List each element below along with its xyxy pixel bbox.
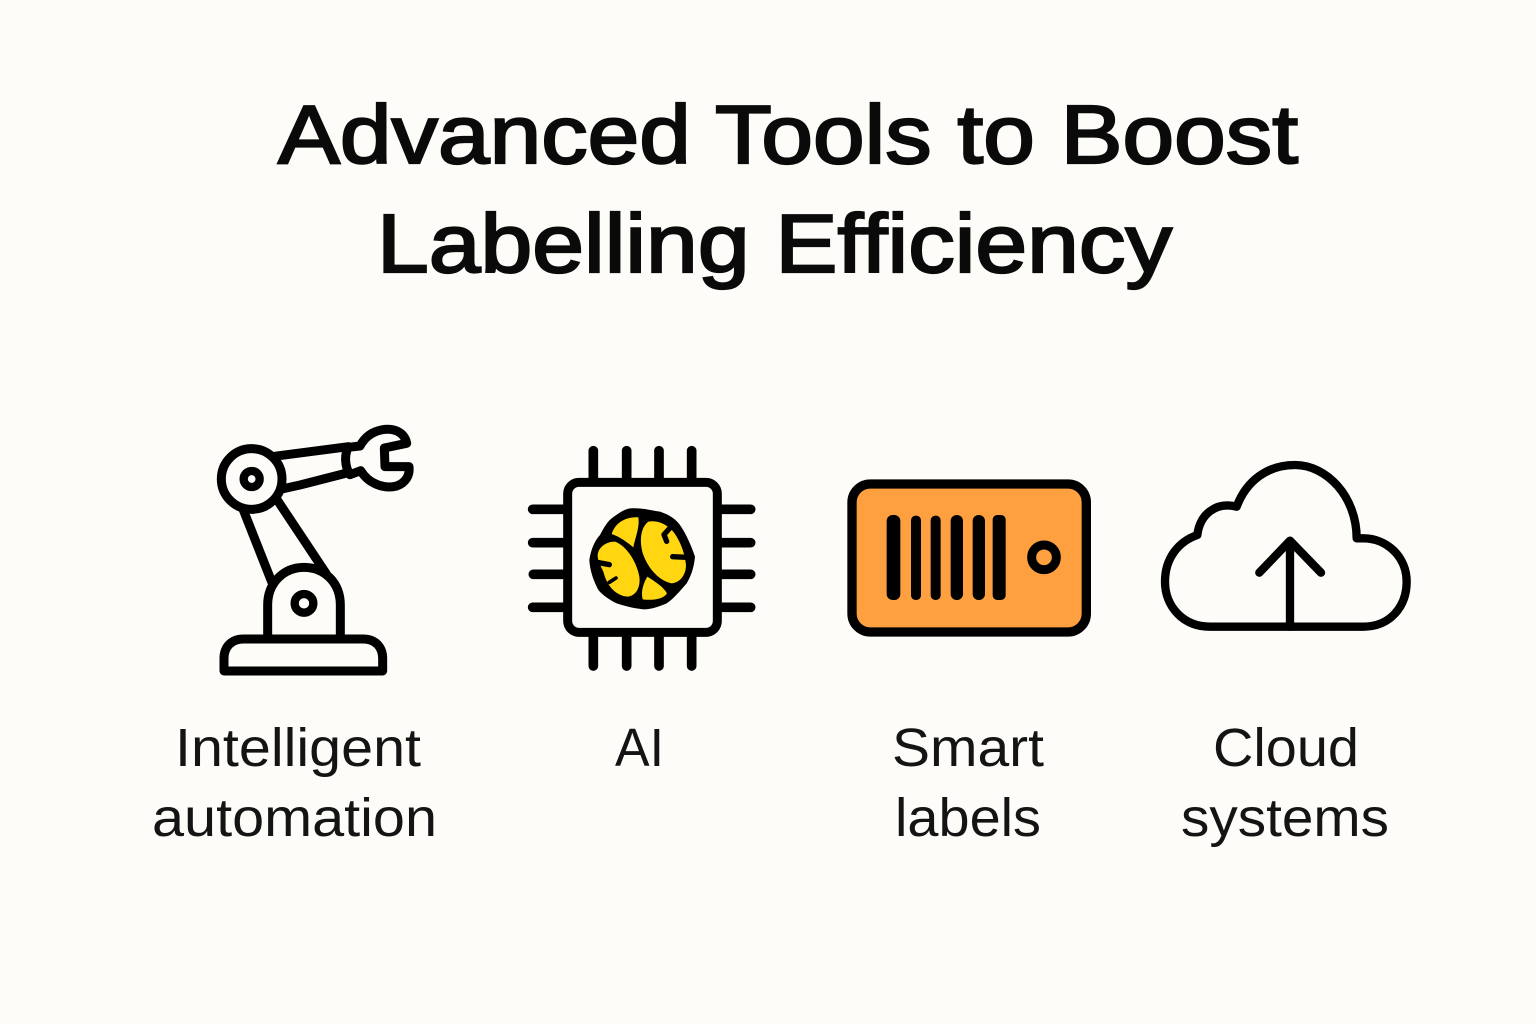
title: Advanced Tools to Boost — [278, 88, 1298, 181]
icon: cloud upload — [1165, 465, 1407, 627]
title — [278, 88, 1298, 290]
label: intelligent automation: Intelligent — [175, 718, 421, 778]
label: smart labels: labels — [895, 788, 1041, 848]
icon: smart label tag with barcode — [852, 484, 1086, 632]
label: intelligent automation: automation — [152, 788, 437, 848]
barcode — [887, 515, 1006, 600]
label: smart labels: Smart — [892, 718, 1044, 778]
icon: AI chip with brain — [533, 451, 751, 666]
brain — [589, 508, 695, 609]
title: Labelling Efficiency — [377, 197, 1173, 290]
label: cloud systems: systems — [1181, 788, 1389, 848]
label: smart labels — [892, 718, 1044, 848]
label: intelligent automation — [152, 718, 437, 848]
label: AI: AI — [615, 718, 664, 778]
icon: robotic arm — [221, 429, 409, 671]
label: cloud systems — [1181, 718, 1389, 848]
label: cloud systems: Cloud — [1213, 718, 1359, 778]
